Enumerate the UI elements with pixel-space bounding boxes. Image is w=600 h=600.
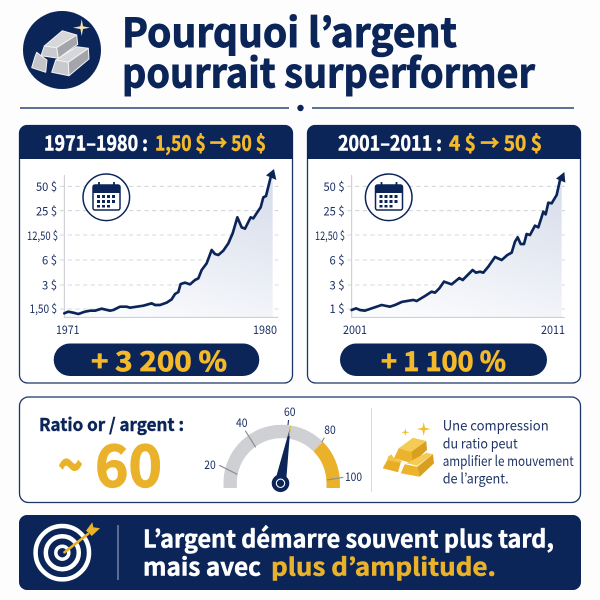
x axis labels: 2011: [541, 321, 565, 338]
panel header: [307, 125, 581, 159]
banner: conclusion: [19, 515, 581, 590]
icon: calendar: [83, 174, 130, 221]
icon: gold bars: [383, 422, 434, 477]
vertical divider: [370, 408, 372, 492]
x axis labels: [343, 321, 565, 338]
explanation text: de l’argent.: [443, 468, 509, 488]
icon: calendar: [365, 174, 412, 221]
panel: 1971-1980: [19, 125, 293, 383]
result pill: [54, 340, 259, 379]
vertical divider: [117, 525, 119, 580]
icon: silver bars: [23, 11, 101, 89]
ratio value: [58, 420, 162, 504]
explanation text: [443, 416, 574, 488]
x axis labels: 1980: [253, 321, 277, 338]
ratio value: ~: [58, 420, 83, 504]
gauge scale labels: 80: [324, 421, 336, 438]
y axis labels: 12,50 $: [315, 227, 345, 244]
conclusion text: [143, 520, 554, 582]
panel: gold/silver ratio: [20, 397, 580, 504]
y axis labels: 3 $: [330, 276, 344, 294]
explanation text: du ratio peut: [443, 434, 518, 454]
gauge scale labels: 100: [345, 468, 362, 485]
gauge scale labels: [204, 403, 362, 485]
icon: target with arrow: [36, 522, 100, 579]
gauge: [204, 403, 362, 492]
gauge scale labels: 60: [284, 403, 296, 420]
result pill: + 1 100 %: [381, 340, 506, 379]
title: pourrait surperformer: [122, 42, 536, 100]
x axis labels: 2001: [343, 321, 367, 338]
explanation text: amplifier le mouvement: [443, 451, 574, 471]
panel heading: 1971–1980 :: [44, 126, 148, 156]
y axis labels: 1,50 $: [30, 300, 57, 317]
panel heading: [338, 126, 542, 156]
line chart: [347, 172, 565, 317]
line chart: [60, 169, 278, 317]
ratio value: 60: [95, 420, 162, 504]
y axis labels: 6 $: [330, 252, 344, 268]
x axis labels: [56, 321, 277, 338]
conclusion text: L’argent démarre souvent plus tard,: [143, 520, 554, 554]
conclusion text: plus d’amplitude.: [271, 548, 496, 582]
title divider: [20, 105, 574, 111]
y axis labels: 1 $: [330, 300, 344, 317]
result pill: [340, 340, 547, 379]
y axis labels: 3 $: [42, 276, 57, 294]
panel heading: 4 $ → 50 $: [449, 126, 542, 156]
y axis labels: 25 $: [36, 202, 57, 220]
y axis labels: 25 $: [324, 202, 344, 220]
y axis labels: 12,50 $: [27, 227, 58, 244]
result pill: + 3 200 %: [91, 340, 227, 379]
ratio label: Ratio or / argent :: [39, 412, 184, 437]
panel header: [19, 125, 293, 159]
x axis labels: 1971: [56, 321, 80, 338]
gauge scale labels: 20: [204, 456, 216, 473]
y axis labels: [27, 178, 58, 317]
explanation text: Une compression: [443, 416, 549, 436]
y axis labels: 50 $: [324, 178, 344, 195]
y axis labels: 6 $: [42, 252, 57, 268]
y axis labels: [315, 178, 345, 317]
gauge scale labels: 40: [236, 414, 248, 431]
conclusion text: mais avec: [143, 548, 261, 582]
panel heading: [44, 126, 266, 156]
y axis labels: 50 $: [36, 178, 57, 195]
panel: 2001-2011: [307, 125, 581, 383]
panel heading: 1,50 $ → 50 $: [155, 126, 266, 156]
panel heading: 2001–2011 :: [338, 126, 442, 156]
title: Pourquoi l’argent: [122, 1, 457, 59]
title: [122, 1, 536, 100]
